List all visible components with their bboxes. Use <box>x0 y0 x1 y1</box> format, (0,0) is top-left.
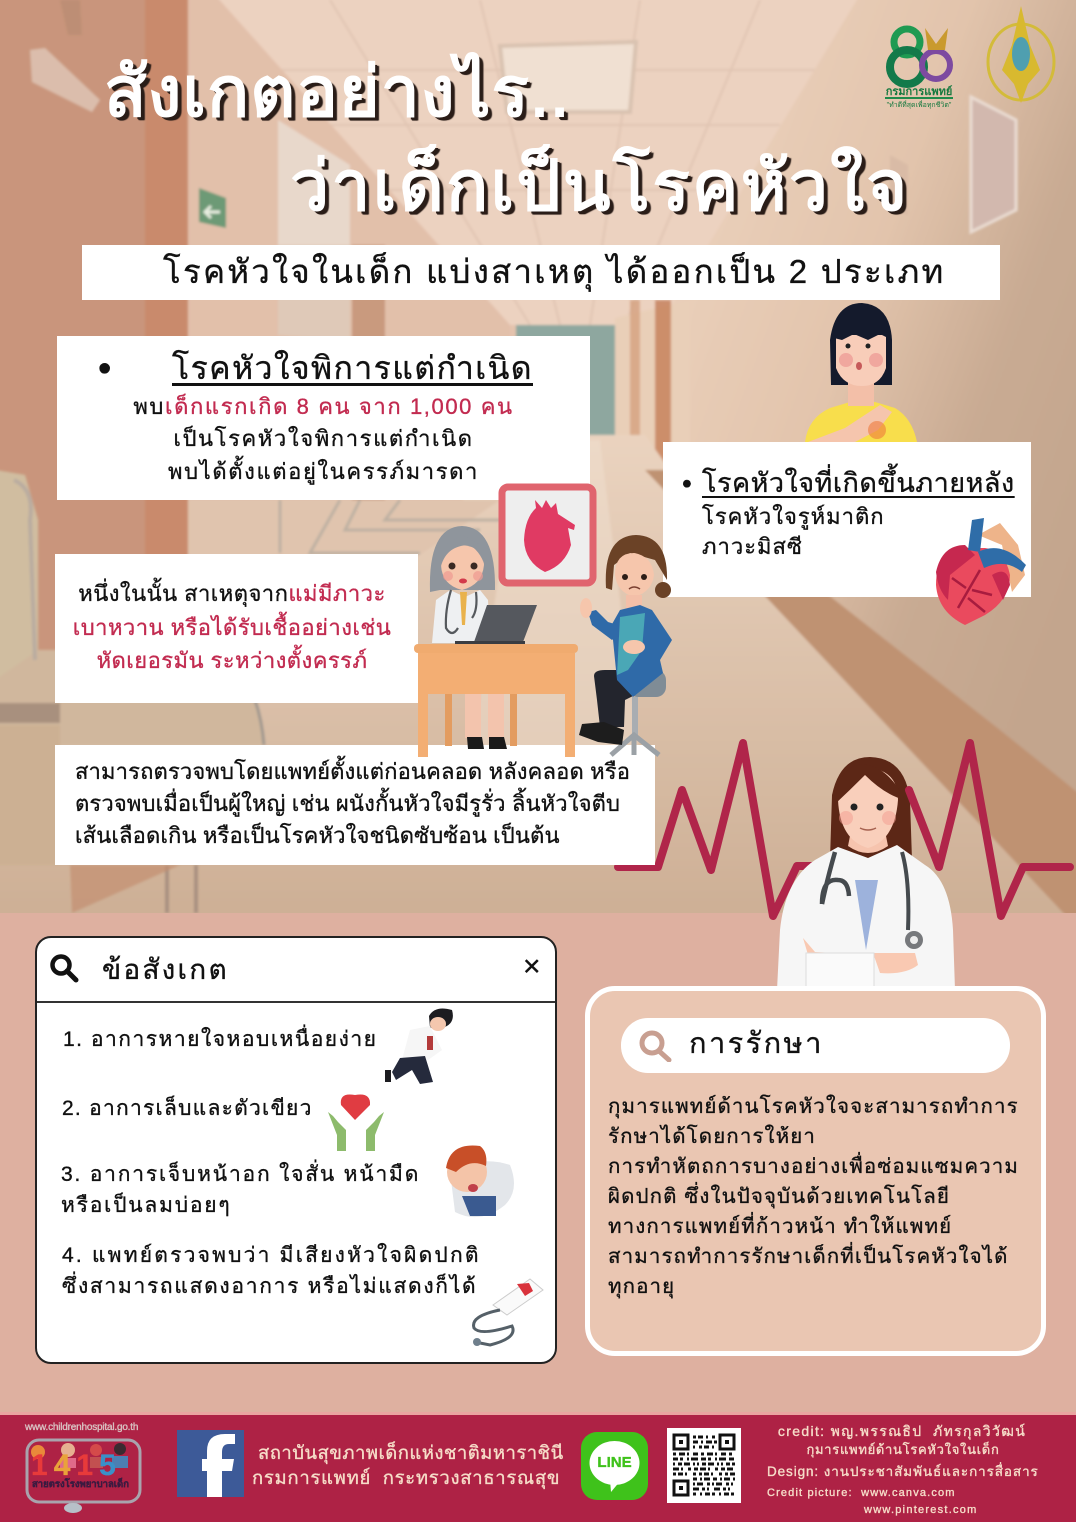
icon: anatomical heart <box>936 518 1026 625</box>
panel: congenital heart disease <box>57 336 590 500</box>
icon: search <box>640 1030 672 1062</box>
item: MIS-C: ภาวะมิสซี <box>702 534 803 559</box>
icon: facebook <box>177 1430 244 1497</box>
detection text line 2: ตรวจพบเมื่อเป็นผู้ใหญ่ เช่น ผนังกั้นหัวใจมีรูรั่ว ลิ้นหัวใจตีบ <box>75 791 620 816</box>
icon: close: × <box>523 950 541 983</box>
heading: ข้อสังเกต <box>102 954 229 985</box>
icon: stethoscope <box>473 1279 543 1346</box>
bullet: • <box>682 468 692 499</box>
detection text line 3: เส้นเลือดเกิน หรือเป็นโรคหัวใจชนิดซับซ้อน เป็นต้น <box>75 823 560 848</box>
LINE text: LINE <box>597 1454 632 1471</box>
footer: institute name line 2: กรมการแพทย์ กระทรวงสาธารณสุข <box>252 1467 560 1488</box>
panel: treatment <box>585 986 1046 1356</box>
logos: department 80 years and royal seal: "ทำดีที่สุดเพื่อทุกชีวิต" <box>887 100 952 109</box>
hotline label: สายตรงโรงพยาบาลเด็ก <box>32 1479 129 1490</box>
logo figures <box>26 1438 142 1513</box>
heading: โรคหัวใจพิการแต่กำเนิด <box>172 350 533 386</box>
panel: detection <box>55 745 655 865</box>
symptom 3 line 1: 3. อาการเจ็บหน้าอก ใจสั่น หน้ามืด <box>61 1163 420 1186</box>
title line 1: สังเกตอย่างไร.. <box>104 53 570 131</box>
logos: department 80 years and royal seal: กรมการแพทย์ <box>886 85 952 98</box>
symptom 4 line 1: 4. แพทย์ตรวจพบว่า มีเสียงหัวใจผิดปกติ <box>62 1244 481 1267</box>
icon: heart poster <box>502 487 593 583</box>
icon: man clutching chest <box>385 1008 453 1084</box>
detection text line 1: สามารถตรวจพบโดยแพทย์ตั้งแต่ก่อนคลอด หลังคลอด หรือ <box>75 759 630 784</box>
credit design: Design: งานประชาสัมพันธ์และการสื่อสาร <box>767 1464 1039 1479</box>
bullet: • <box>98 348 111 390</box>
treatment text: สามารถทำการรักษาเด็กที่เป็นโรคหัวใจได้ <box>608 1245 1009 1268</box>
description line 2: พบได้ตั้งแต่อยู่ในครรภ์มารดา <box>168 459 479 484</box>
symptom 2: 2. อาการเล็บและตัวเขียว <box>62 1097 313 1120</box>
illustration: patient on stool <box>579 535 672 755</box>
cause text line 1: หนึ่งในนั้น สาเหตุจากแม่มีภาวะ <box>78 581 386 606</box>
website: www.childrenhospital.go.th <box>25 1422 138 1433</box>
treatment text: กุมารแพทย์ด้านโรคหัวใจจะสามารถทำการ <box>608 1095 1019 1118</box>
icon: search <box>50 954 78 982</box>
panel: observation search card <box>35 936 557 1364</box>
subtitle text: โรคหัวใจในเด็ก แบ่งสาเหตุ ได้ออกเป็น 2 ประเภท <box>163 253 945 290</box>
footer: hospital logo <box>24 1422 142 1513</box>
panel: maternal causes <box>55 554 418 703</box>
description line 1: เป็นโรคหัวใจพิการแต่กำเนิด <box>173 426 474 451</box>
treatment text: ทุกอายุ <box>608 1275 675 1298</box>
credit doctor: credit: พญ.พรรณธิป ภัทรกุลวิวัฒน์ <box>778 1423 1026 1439</box>
footer: institute name line 1: สถาบันสุขภาพเด็กแห่งชาติมหาราชินี <box>258 1442 564 1463</box>
symptom 4 line 2: ซึ่งสามารถแสดงอาการ หรือไม่แสดงก็ได้ <box>62 1275 477 1298</box>
search pill with heading <box>621 1018 1010 1073</box>
icon: hands holding heart <box>328 1094 384 1151</box>
footer: credits <box>767 1423 1039 1516</box>
treatment text: ทางการแพทย์ที่ก้าวหน้า ทำให้แพทย์ <box>608 1215 952 1238</box>
card header divider and search row <box>37 1001 555 1003</box>
credit picture second source: www.pinterest.com <box>864 1504 978 1516</box>
subtitle bar <box>82 245 1000 300</box>
QR code <box>667 1428 741 1503</box>
panel: acquired heart disease <box>663 442 1031 597</box>
treatment text <box>608 1094 1019 1298</box>
illustration: senior doctor at desk <box>414 526 578 757</box>
hotline number: 1415 <box>31 1449 122 1482</box>
statistic line: พบเด็กแรกเกิด 8 คน จาก 1,000 คน <box>133 394 514 419</box>
heading: โรคหัวใจที่เกิดขึ้นภายหลัง <box>702 468 1015 498</box>
item: rheumatic: โรคหัวใจรูห์มาติก <box>702 504 885 529</box>
icon: boy with chest pain <box>446 1145 514 1217</box>
title line 2: ว่าเด็กเป็นโรคหัวใจ <box>290 147 909 225</box>
treatment text: รักษาได้โดยการให้ยา <box>608 1125 816 1148</box>
treatment text: ผิดปกติ ซึ่งในปัจจุบันด้วยเทคโนโลยี <box>608 1185 950 1208</box>
symptom 1: 1. อาการหายใจหอบเหนื่อยง่าย <box>63 1028 377 1051</box>
symptom 3 line 2: หรือเป็นลมบ่อยๆ <box>61 1194 231 1217</box>
treatment text: การทำหัตถการบางอย่างเพื่อซ่อมแซมความ <box>608 1155 1019 1178</box>
cause text line 3: หัดเยอรมัน ระหว่างตั้งครรภ์ <box>97 648 367 673</box>
icon: LINE <box>581 1432 648 1500</box>
credit role: กุมารแพทย์ด้านโรคหัวใจในเด็ก <box>806 1442 1000 1457</box>
cause text line 2: เบาหวาน หรือได้รับเชื้ออย่างเช่น <box>73 615 391 640</box>
heading: การรักษา <box>689 1028 824 1060</box>
credit picture: Credit picture: www.canva.com <box>767 1487 956 1499</box>
